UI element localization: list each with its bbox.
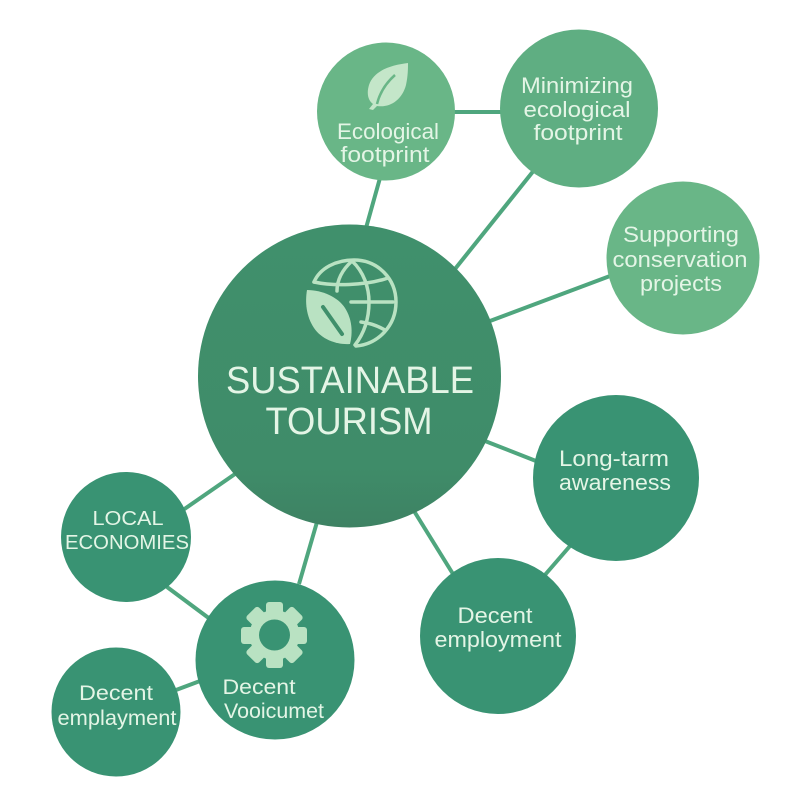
node: ecological footprint: Ecological [337, 119, 439, 144]
node: local economies: ECONOMIES [65, 532, 189, 554]
icon: globe with leaf [306, 260, 396, 346]
node: long-tarm awareness [533, 395, 699, 561]
node: supporting conservation projects: conservation [612, 247, 748, 272]
icon: leaf [368, 63, 408, 110]
central node: sustainable tourism [198, 224, 501, 528]
node: minimizing ecological footprint: ecological [524, 97, 630, 122]
node: long-tarm awareness: awareness [559, 470, 671, 495]
node: decent vooicumet: Vooicumet [224, 700, 324, 723]
node: decent vooicumet [196, 580, 354, 740]
node: minimizing ecological footprint: footprint [534, 120, 622, 145]
node: decent emplayment: emplayment [58, 707, 177, 730]
node: decent vooicumet: Decent [222, 676, 296, 699]
node: minimizing ecological footprint: Minimizing [521, 73, 633, 98]
node: local economies [61, 472, 191, 602]
node: ecological footprint: footprint [340, 142, 430, 167]
central node: sustainable tourism: TOURISM [266, 401, 432, 443]
node: decent employment: Decent [458, 603, 532, 628]
node: ecological footprint [317, 42, 455, 180]
node: local economies: LOCAL [92, 508, 164, 530]
node: decent employment: employment [434, 627, 562, 652]
heading: sustainable tourism: SUSTAINABLE [226, 360, 474, 402]
node: decent emplayment [52, 648, 180, 776]
connector lines [167, 112, 610, 690]
node: long-tarm awareness: Long-tarm [559, 446, 669, 471]
icon: gear [241, 602, 307, 668]
node: decent emplayment: Decent [79, 682, 153, 705]
node: supporting conservation projects: projects [640, 271, 722, 296]
node: supporting conservation projects: Supporting [623, 222, 739, 247]
node: minimizing ecological footprint [500, 30, 658, 188]
node: supporting conservation projects [606, 182, 760, 334]
node: decent employment [420, 558, 576, 714]
